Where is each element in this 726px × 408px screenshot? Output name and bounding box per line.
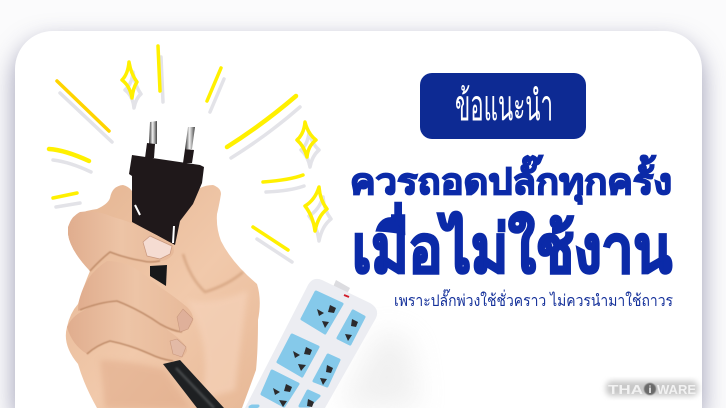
- ring finger: [67, 301, 187, 361]
- ring fingernail: [170, 339, 186, 357]
- badge: recommendation: [420, 73, 586, 139]
- middle finger: [78, 261, 193, 332]
- lower cord: [163, 360, 224, 408]
- icon: power strip: [245, 279, 420, 408]
- title line 1: ควรถอดปลั๊กทุกครั้ง: [350, 154, 672, 205]
- strip soft shadow: [354, 340, 414, 406]
- title line 2: เมื่อไม่ใช้งาน: [352, 202, 672, 286]
- watermark logo: THA: [608, 383, 643, 397]
- plug body: [129, 155, 204, 245]
- middle fingernail: [177, 309, 193, 332]
- plug prongs: [145, 121, 195, 163]
- watermark logo: i: [649, 385, 652, 396]
- subtitle: เพราะปลั๊กพ่วงใช้ชั่วคราว ไม่ควรนำมาใช้ถาวร: [394, 289, 673, 310]
- upper cord: [150, 265, 167, 286]
- spark shadows: [53, 57, 331, 262]
- spark yellow strokes: [49, 46, 327, 250]
- icon: spark lines and sparkles: [49, 46, 331, 262]
- red indicator: [344, 295, 349, 297]
- icon: hand gripping plug: [66, 121, 260, 408]
- watermark logo: [606, 381, 698, 397]
- hand silhouette: [66, 185, 260, 408]
- thumb crease shading: [183, 254, 243, 292]
- socket holes: [273, 305, 358, 407]
- sockets: [250, 292, 364, 407]
- index finger: [68, 212, 174, 271]
- watermark logo: WARE: [657, 383, 696, 397]
- badge: recommendation: ข้อแนะนำ: [455, 82, 553, 129]
- plug highlights: [135, 205, 174, 243]
- strip body: [334, 280, 350, 292]
- index fingernail: [143, 236, 172, 259]
- palm shading: [192, 293, 246, 396]
